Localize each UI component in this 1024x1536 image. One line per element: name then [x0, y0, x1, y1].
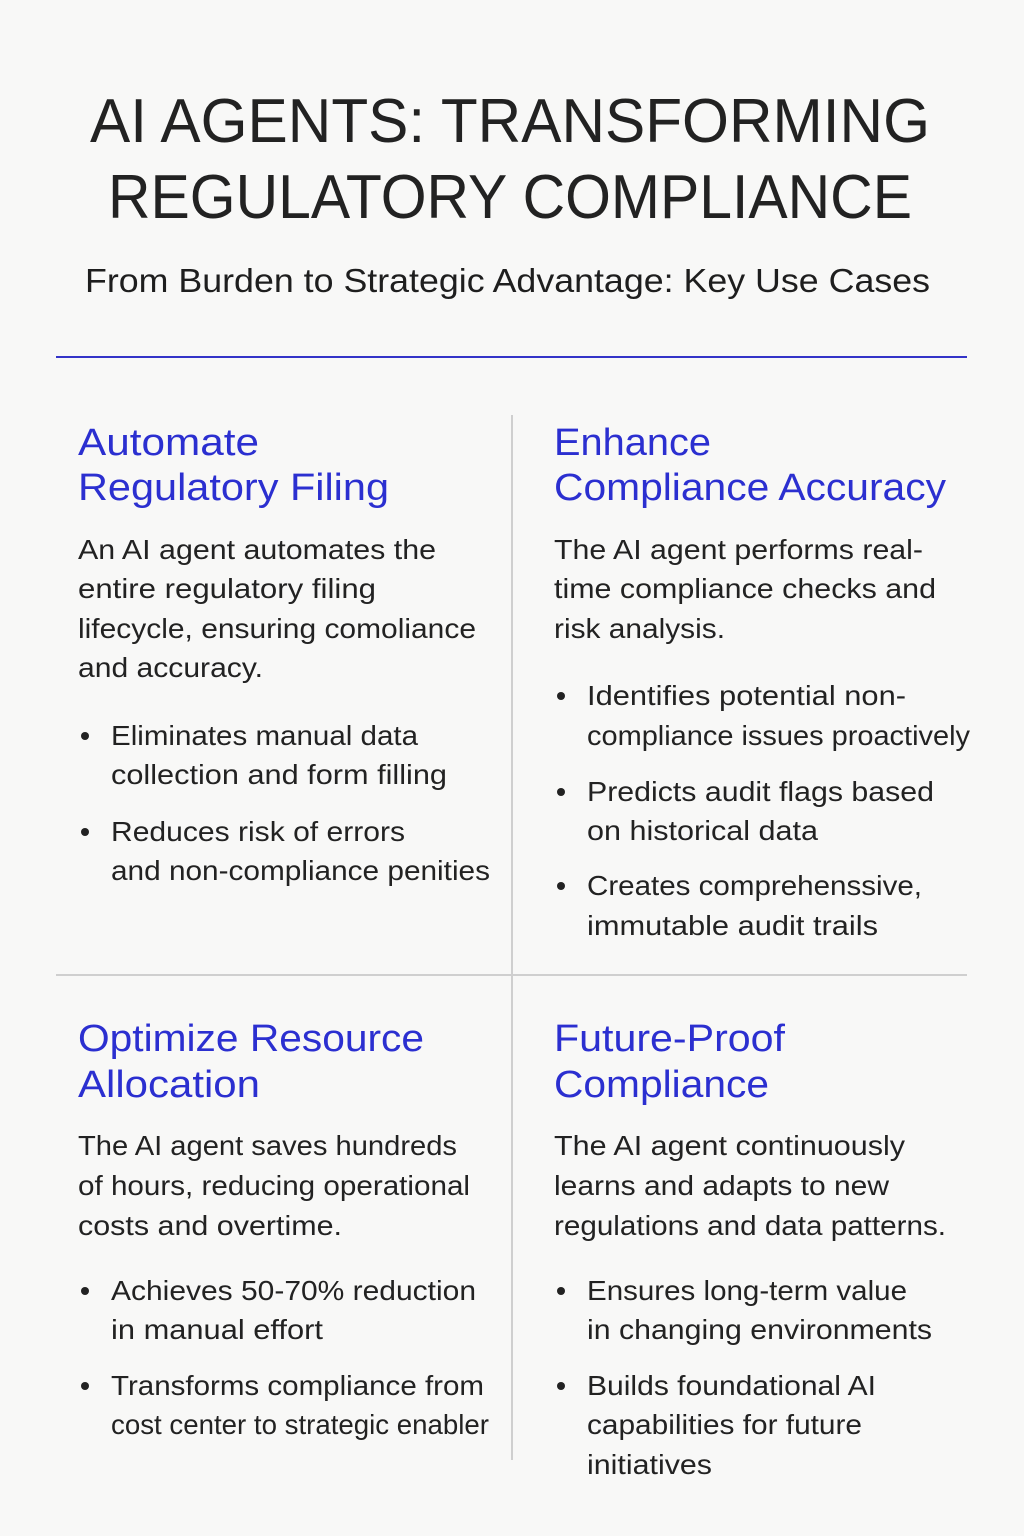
heading: enhance compliance accuracy: Enhance — [554, 422, 711, 464]
bullets: accuracy benefits: Predicts audit flags based — [587, 776, 934, 807]
bullets: future-proof benefits: Ensures long-term value — [587, 1275, 907, 1306]
bullets: accuracy benefits: on historical data — [587, 815, 818, 846]
bullets: future-proof benefits: in changing environments — [587, 1314, 932, 1345]
bullets: filing benefits — [81, 720, 490, 886]
bullets: future-proof benefits: Builds foundational AI — [587, 1370, 876, 1401]
bullets: resource benefits — [81, 1275, 489, 1440]
bullets: filing benefits: Eliminates manual data — [111, 720, 418, 751]
panel: enhance compliance accuracy — [554, 422, 970, 941]
bullets: accuracy benefits — [557, 680, 970, 941]
panel: future-proof compliance — [554, 1018, 946, 1480]
text: resource description: of hours, reducing operational — [78, 1170, 470, 1201]
bullets: future-proof benefits: initiatives — [587, 1449, 712, 1480]
title — [90, 87, 930, 232]
bullets: resource benefits: Transforms compliance from — [111, 1370, 484, 1401]
heading: future-proof compliance — [554, 1018, 785, 1106]
bullets: future-proof benefits — [557, 1275, 932, 1480]
bullets: filing benefits: Reduces risk of errors — [111, 816, 405, 847]
bullets: filing benefits: collection and form filling — [111, 759, 447, 790]
text: accuracy description: The AI agent performs real- — [554, 534, 923, 565]
text: filing description — [78, 534, 476, 683]
bullets: resource benefits: in manual effort — [111, 1314, 323, 1345]
bullets: accuracy benefits: Identifies potential non- — [587, 680, 906, 711]
bullets: resource benefits: Achieves 50-70% reduction — [111, 1275, 476, 1306]
bullets: resource benefits: cost center to strategic enabler — [111, 1409, 489, 1440]
bullets: accuracy benefits: immutable audit trails — [587, 910, 878, 941]
text: accuracy description — [554, 534, 936, 644]
heading: enhance compliance accuracy: Compliance Accuracy — [554, 467, 946, 509]
text: accuracy description: time compliance checks and — [554, 573, 936, 604]
bullets: accuracy benefits: Creates comprehenssive, — [587, 870, 922, 901]
text: resource description: costs and overtime. — [78, 1210, 342, 1241]
heading: future-proof compliance: Future-Proof — [554, 1018, 785, 1060]
heading: automate regulatory filing: Regulatory Filing — [78, 467, 389, 509]
bullets: future-proof benefits: capabilities for future — [587, 1409, 862, 1440]
text: future-proof description: regulations and data patterns. — [554, 1210, 946, 1241]
bullets: accuracy benefits: compliance issues proactively — [587, 720, 970, 751]
text: filing description: An AI agent automates the — [78, 534, 436, 565]
text: resource description: The AI agent saves hundreds — [78, 1130, 457, 1161]
text: accuracy description: risk analysis. — [554, 613, 725, 644]
text: resource description — [78, 1130, 470, 1241]
text: filing description: and accuracy. — [78, 652, 263, 683]
panel: optimize resource allocation — [78, 1018, 489, 1440]
heading: optimize resource allocation: Optimize Resource — [78, 1018, 424, 1060]
bullets: filing benefits: and non-compliance penities — [111, 855, 490, 886]
text: future-proof description — [554, 1130, 946, 1241]
panel: automate regulatory filing — [78, 422, 490, 886]
text: filing description: entire regulatory filing — [78, 573, 376, 604]
heading: automate regulatory filing — [78, 422, 389, 509]
heading: optimize resource allocation — [78, 1018, 424, 1106]
heading: enhance compliance accuracy — [554, 422, 946, 509]
text: future-proof description: The AI agent continuously — [554, 1130, 905, 1161]
title: AI AGENTS: TRANSFORMING — [90, 87, 930, 156]
text: future-proof description: learns and adapts to new — [554, 1170, 890, 1201]
subtitle: From Burden to Strategic Advantage: Key Use Cases — [85, 262, 930, 299]
title: REGULATORY COMPLIANCE — [108, 163, 912, 232]
text: filing description: lifecycle, ensuring comoliance — [78, 613, 476, 644]
heading: automate regulatory filing: Automate — [78, 422, 259, 464]
heading: future-proof compliance: Compliance — [554, 1064, 769, 1106]
heading: optimize resource allocation: Allocation — [78, 1064, 260, 1106]
